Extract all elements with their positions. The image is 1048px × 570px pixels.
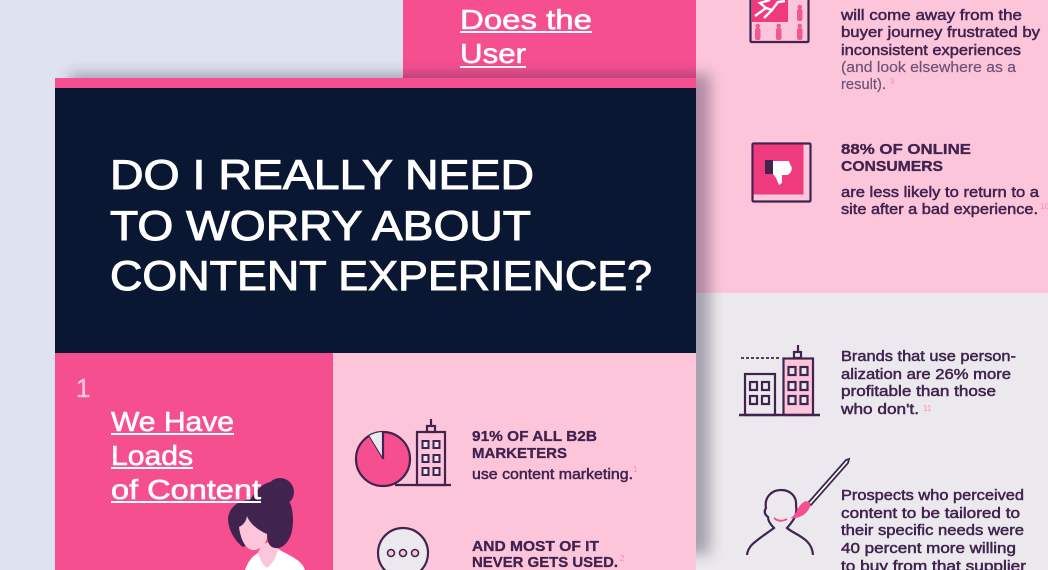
text: tailored content: Prospects who perceived [841,487,1024,504]
section heading [111,406,261,505]
icon: person with paintbrush [747,459,849,555]
text: tailored content [841,487,1026,570]
text: personalization: who don't. [840,401,919,418]
text: frustrated buyers: (and look elsewhere as a [841,59,1017,76]
back page heading [460,4,592,69]
text: 88% of online consumers [841,142,1048,218]
text: frustrated buyers: result). [841,76,886,93]
text: frustrated buyers: 9 [890,77,895,86]
section number: 1 [76,373,90,403]
title: DO I REALLY NEED [110,151,534,198]
title [110,151,652,299]
text: personalization [840,348,1016,418]
panel: section one stats [333,353,696,570]
text: 88% of online consumers: 88% OF ONLINE [841,142,971,158]
text: most never used: AND MOST OF IT [472,539,599,555]
title: CONTENT EXPERIENCE? [110,252,652,299]
text: tailored content: 40 percent more willing [841,540,1016,557]
section heading: of Content [111,474,261,505]
icon: thumbs down [752,144,810,202]
text: personalization: Brands that use person- [841,348,1016,365]
text: 88% of online consumers: are less likely to return to a [841,184,1040,201]
text: 91% of B2B marketers: use content marketing. [472,466,633,483]
text: personalization: alization are 26% more [841,366,1011,383]
text: 91% of B2B marketers [472,429,638,483]
illustration: woman [228,478,305,570]
text: tailored content: their specific needs were [841,522,1024,539]
panel: back page grey stats [696,293,1048,570]
text: 88% of online consumers: CONSUMERS [841,159,943,175]
panel: section one heading [55,353,333,570]
icon: pie chart and building [356,419,451,486]
text: frustrated buyers: will come away from the [840,7,1022,24]
text: 88% of online consumers: site after a bad experience. [841,201,1038,218]
back page heading: User [460,38,526,69]
icon: frustrated runner [750,0,808,42]
text: 91% of B2B marketers: MARKETERS [472,446,567,462]
text: tailored content: content to be tailored to [841,505,1020,522]
text: 91% of B2B marketers: 1 [633,465,638,474]
panel: front page [55,78,696,570]
panel: back page pink stats [696,0,1048,293]
text: frustrated buyers: inconsistent experiences [841,42,1021,59]
section heading: We Have [111,406,234,437]
icon: buildings [739,345,820,415]
text: most never used: 2 [620,554,625,563]
text: personalization: profitable than those [841,383,996,400]
text: personalization: 11 [923,404,932,413]
top accent bar [55,78,696,88]
text: frustrated buyers [840,7,1041,93]
front panel shadow [70,74,710,554]
text: frustrated buyers: buyer journey frustrated by [841,24,1041,41]
text: most never used [472,539,625,570]
panel: back page pink column [403,0,696,100]
section heading: Loads [111,440,193,471]
title: TO WORRY ABOUT [110,202,531,249]
panel: title block [55,88,696,353]
text: 91% of B2B marketers: 91% OF ALL B2B [472,429,597,445]
icon: speech bubble [378,528,428,570]
back page heading: Does the [460,4,592,35]
